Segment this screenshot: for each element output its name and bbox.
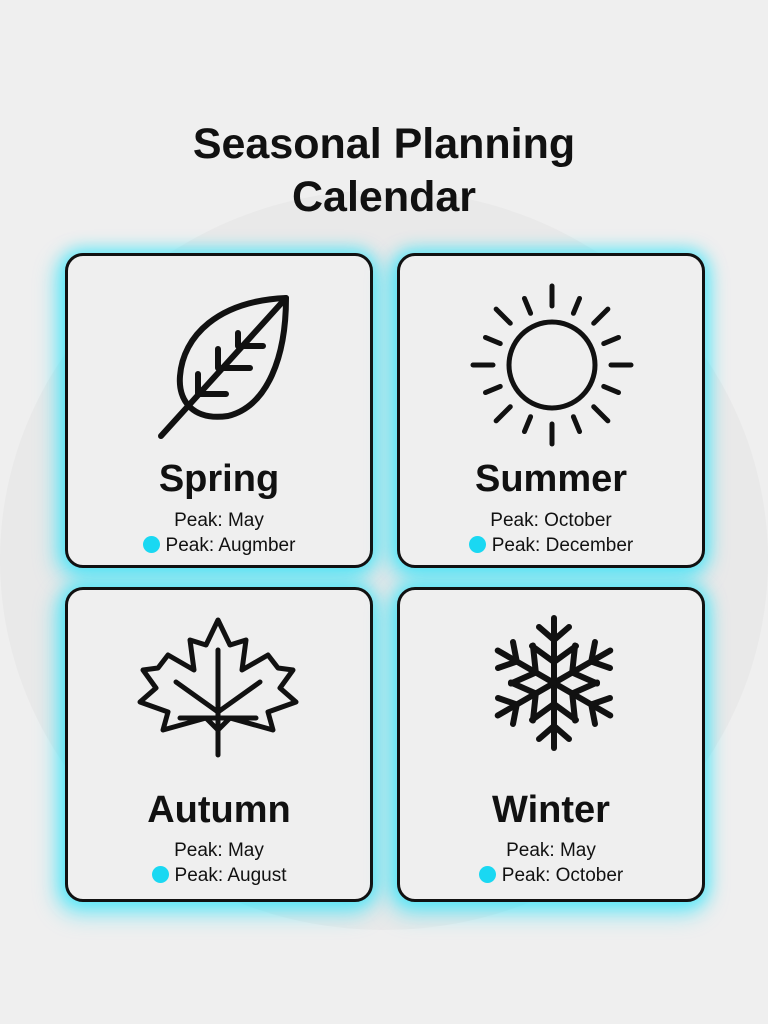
title: Calendar	[292, 173, 476, 221]
icon: leaf	[158, 295, 289, 439]
text: peaks	[469, 510, 633, 556]
icon: snowflake	[494, 615, 614, 751]
text: peaks	[479, 840, 623, 886]
text: peaks	[143, 510, 296, 556]
title: Seasonal Planning	[193, 120, 575, 168]
panel: autumn	[65, 587, 373, 902]
text: peaks: Peak: August	[175, 865, 286, 886]
icon: sun	[470, 284, 634, 446]
heading: Winter: Winter	[492, 789, 610, 831]
panel: summer	[397, 253, 705, 568]
heading: Autumn: Autumn	[147, 789, 291, 831]
heading: Spring: Spring	[159, 458, 279, 500]
text: peaks: Peak: Augmber	[166, 535, 295, 556]
text: peaks: Peak: December	[492, 535, 633, 556]
panel: winter	[397, 587, 705, 902]
heading: Summer: Summer	[475, 458, 627, 500]
text: peaks: Peak: October	[490, 510, 612, 531]
text: peaks: Peak: October	[502, 865, 623, 886]
panel: spring	[65, 253, 373, 568]
title	[193, 120, 575, 221]
text: peaks	[152, 840, 286, 886]
text: peaks: Peak: May	[174, 840, 264, 861]
text: peaks: Peak: May	[506, 840, 596, 861]
text: peaks: Peak: May	[174, 510, 264, 531]
icon: maple leaf	[138, 618, 298, 758]
